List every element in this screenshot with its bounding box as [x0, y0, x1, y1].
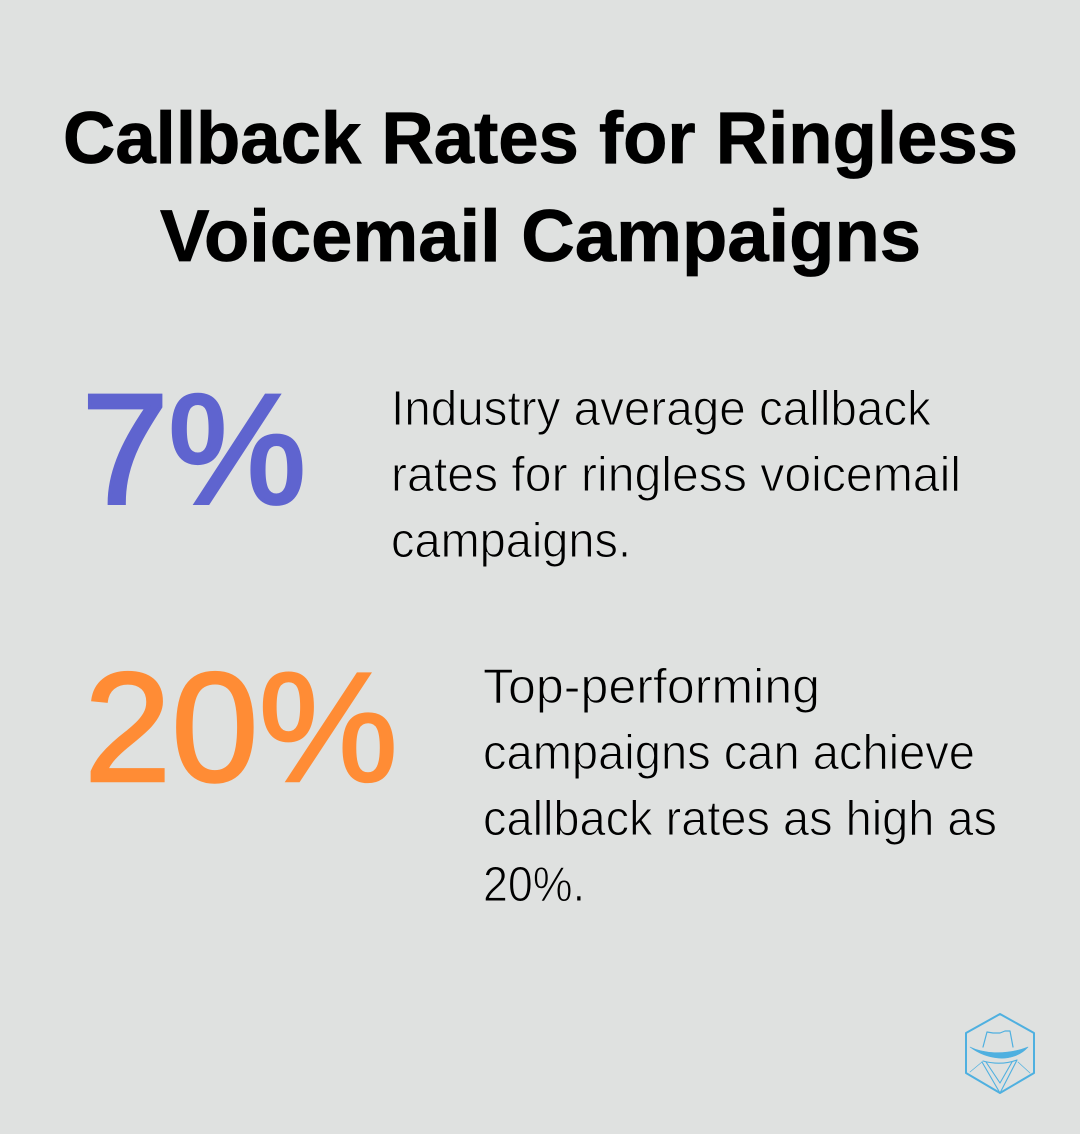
statistic: 20%: 20%	[84, 641, 398, 815]
text block: industry average	[391, 382, 961, 568]
icon: logo hexagon with hat	[966, 1014, 1034, 1093]
statistic: 7%: 7%	[82, 363, 306, 537]
text block: industry average: rates for ringless voicemail	[391, 448, 961, 502]
text block: top-performing	[483, 660, 997, 912]
title	[63, 98, 1018, 277]
text block: top-performing: callback rates as high as	[483, 792, 997, 846]
title: Callback Rates for Ringless	[63, 98, 1018, 179]
text block: top-performing: 20%.	[483, 858, 585, 912]
text block: industry average: Industry average callback	[391, 382, 931, 436]
title: Voicemail Campaigns	[160, 196, 921, 277]
text block: top-performing: campaigns can achieve	[483, 726, 975, 780]
text block: top-performing: Top-performing	[483, 660, 820, 714]
text block: industry average: campaigns.	[391, 514, 631, 568]
